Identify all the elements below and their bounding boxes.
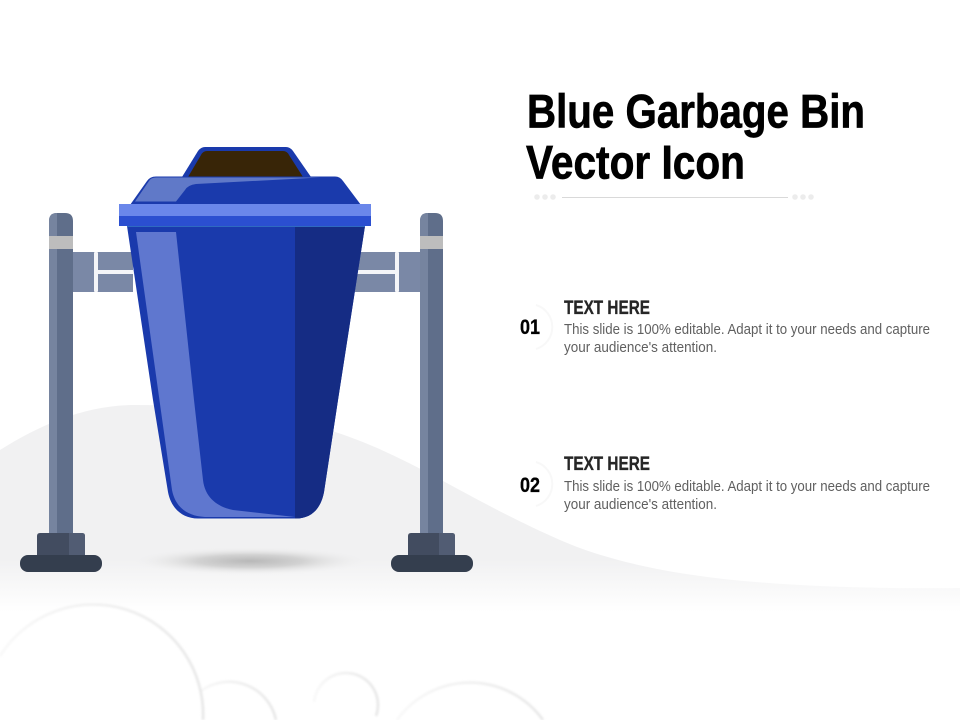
ground shadow: [132, 547, 368, 575]
background hill: [0, 405, 960, 720]
title: Vector Icon: [526, 136, 745, 188]
bin body: [127, 226, 365, 518]
number badge 01: [520, 305, 552, 349]
item 02: [520, 454, 930, 513]
left post stand: [20, 213, 135, 572]
left foot: [20, 533, 102, 572]
decorative bubbles: [0, 605, 543, 720]
heading 02: TEXT HERE: [564, 454, 650, 475]
lid highlight: [135, 178, 320, 202]
number badge 02: 02: [520, 474, 540, 497]
title: Blue Garbage Bin: [527, 84, 865, 138]
icon: blue garbage bin: [119, 147, 371, 518]
right post stand: [355, 213, 473, 572]
item 01: [520, 298, 930, 356]
body 01: This slide is 100% editable. Adapt it to your needs and capture: [564, 322, 930, 338]
right foot: [391, 533, 473, 572]
left arm: [73, 252, 135, 292]
right arm: [355, 252, 420, 292]
title: [526, 84, 865, 188]
number badge 01: 01: [520, 316, 540, 339]
lid rim: [119, 204, 371, 227]
body 02: your audience's attention.: [564, 497, 717, 513]
title divider: [534, 194, 814, 200]
body 02: This slide is 100% editable. Adapt it to your needs and capture: [564, 479, 930, 495]
left post: [49, 213, 73, 540]
body 01: your audience's attention.: [564, 340, 717, 356]
heading 01: TEXT HERE: [564, 298, 650, 319]
bin hopper: [182, 147, 311, 177]
right post: [420, 213, 443, 540]
bin highlight: [136, 232, 295, 517]
body 01: [564, 322, 930, 356]
bin lid: [130, 176, 361, 205]
bin shaded side: [295, 226, 365, 518]
number badge 02: [520, 462, 552, 506]
hopper opening: [188, 151, 303, 177]
body 02: [564, 479, 930, 513]
